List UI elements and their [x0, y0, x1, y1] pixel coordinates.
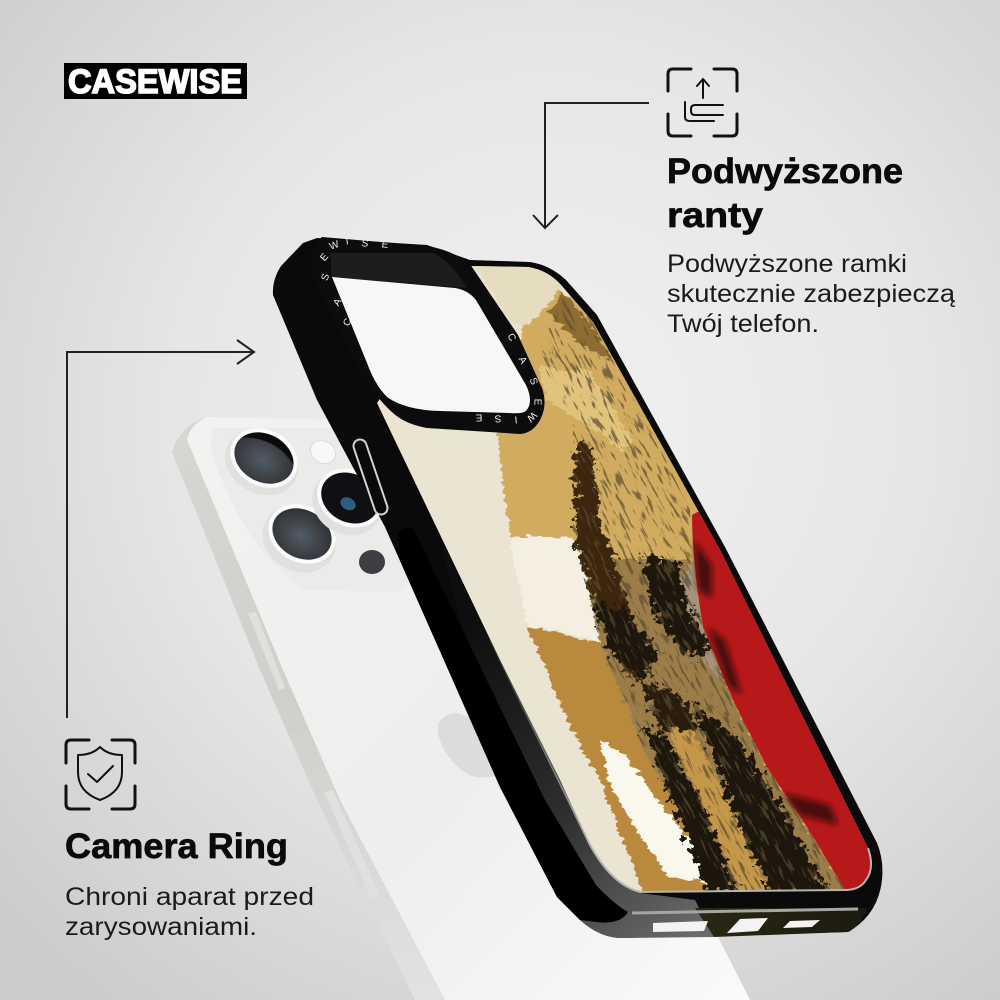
ring text: E [532, 399, 542, 406]
ring text: E [475, 411, 482, 423]
cream base [370, 255, 890, 900]
side buttons [248, 612, 380, 900]
artwork rim highlight [490, 640, 871, 892]
lens 3 [301, 456, 395, 548]
icon: raised edges [668, 69, 737, 136]
case side gloss [440, 540, 714, 938]
mid gold-tan mass [583, 560, 847, 893]
ring window [332, 277, 530, 413]
ring text: S [527, 376, 540, 387]
ring text: I [514, 413, 518, 425]
heading: camera ring: Camera Ring [65, 827, 288, 866]
arrow: raised edges [533, 103, 649, 228]
red panel [692, 512, 870, 889]
white patch lower [600, 740, 718, 884]
side button on case [360, 446, 381, 508]
upper brown patch [548, 292, 612, 362]
ring text: W [328, 239, 341, 253]
heading: raised edges [667, 152, 903, 235]
red dark patches [694, 540, 838, 825]
flash [306, 436, 340, 468]
gold band [497, 290, 870, 893]
white phone [172, 415, 750, 1000]
text block: raised edges: Podwyższone ramki [667, 250, 907, 278]
gold lower stripe [665, 725, 772, 893]
port cutouts [653, 918, 820, 933]
ring text: A [516, 355, 529, 366]
case artwork: abstract paint [377, 266, 870, 891]
dark paint strokes [575, 445, 828, 893]
ring text: C [505, 332, 518, 343]
arrow: camera ring [67, 340, 254, 718]
apple logo [438, 713, 495, 778]
ring text: S [361, 238, 369, 250]
lens 1 [214, 415, 311, 508]
grey-tan stripe [677, 560, 722, 680]
case shell [273, 238, 882, 938]
microphone sensor [359, 550, 385, 574]
lens 2 [251, 491, 349, 585]
orange lower panel [528, 627, 730, 893]
text block: raised edges: skutecznie zabezpieczą [667, 280, 955, 308]
text block: camera ring: Chroni aparat przed [65, 883, 314, 911]
side slot [398, 527, 628, 923]
ring text: S [494, 412, 501, 424]
ring text: S [320, 272, 332, 282]
ring inner wall [330, 253, 467, 288]
text block: raised edges: Twój telefon. [667, 310, 819, 338]
ring text: A [331, 297, 344, 308]
ring text: E [318, 251, 331, 264]
silver rim line [632, 909, 858, 913]
phone side edge [172, 417, 445, 1000]
camera plateau [211, 428, 410, 592]
ring text [318, 236, 542, 425]
black phone case [273, 238, 882, 938]
text block: camera ring: zarysowaniami. [65, 913, 257, 941]
ring outer [311, 237, 545, 434]
phone back panel [187, 417, 750, 1000]
ring text: E [381, 239, 389, 251]
heading: raised edges: ranty [667, 196, 764, 235]
text block: camera ring [65, 883, 314, 941]
icon: shield [66, 740, 135, 809]
rough paint bands [470, 258, 870, 893]
ring text: C [341, 317, 354, 328]
ring text: W [524, 409, 539, 424]
brand logo: CASEWISE [68, 63, 242, 101]
camera ring [311, 236, 545, 434]
top cream stroke [475, 266, 562, 326]
heading: raised edges: Podwyższone [667, 152, 903, 191]
text block: raised edges [667, 250, 955, 338]
white patch upper [510, 537, 603, 643]
speckle texture [542, 290, 844, 890]
light gold highlight [540, 365, 632, 452]
case bottom right [695, 908, 868, 937]
ring text: I [345, 236, 349, 248]
